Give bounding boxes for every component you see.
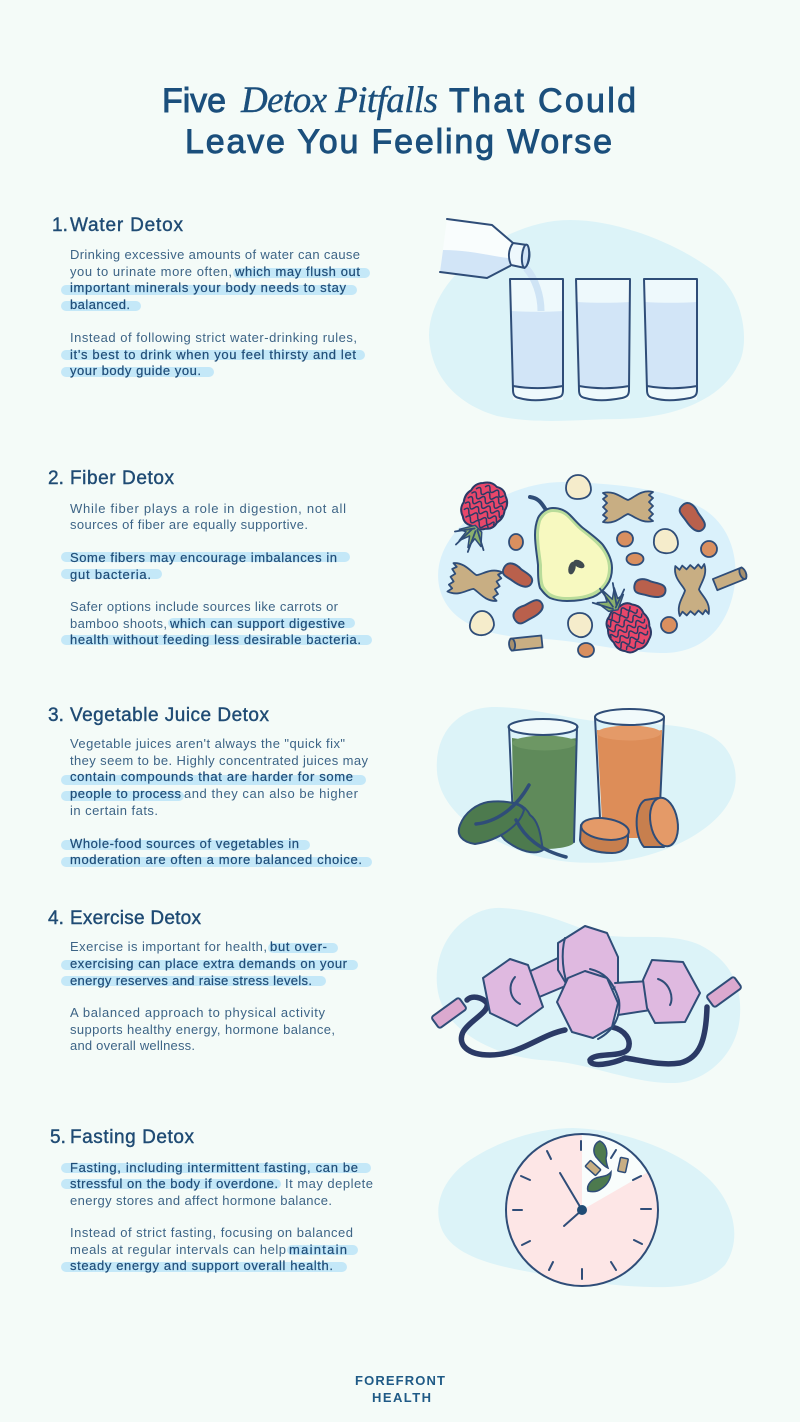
body text: vegetable juice detox: and they can also be higher	[184, 786, 359, 801]
body text: water detox: your body guide you.	[70, 363, 201, 378]
heading: fasting detox: 5.	[50, 1127, 66, 1148]
body text: vegetable juice detox: in certain fats.	[70, 803, 158, 818]
title: Leave You Feeling Worse	[185, 123, 612, 161]
clock outline	[506, 1134, 658, 1286]
highlight pills: fiber detox	[61, 552, 372, 645]
body text: fasting detox	[70, 1160, 373, 1273]
body text: vegetable juice detox: moderation are often a more balanced choice.	[70, 852, 362, 867]
tube pasta	[508, 567, 748, 651]
panel: fiber detox text	[48, 468, 372, 647]
heading: exercise detox: 4.	[48, 908, 64, 929]
panel: fasting detox text	[50, 1127, 373, 1273]
farfalle pasta	[447, 491, 709, 616]
body text: exercise detox	[70, 939, 348, 1053]
body text: fiber detox: Some fibers may encourage imbalances in	[70, 550, 337, 565]
body text: water detox: which may flush out	[234, 264, 360, 279]
body text: exercise detox: but over-	[270, 939, 327, 954]
small beans	[509, 532, 717, 657]
body text: fiber detox: bamboo shoots,	[70, 616, 167, 631]
body text: fasting detox: It may deplete	[285, 1176, 373, 1191]
clock ticks	[513, 1141, 651, 1279]
body text: exercise detox: supports healthy energy, hormone balance,	[70, 1022, 335, 1037]
body text: vegetable juice detox: they seem to be. Highly concentrated juices may	[70, 753, 368, 768]
illustration: vegetable juices	[437, 707, 736, 863]
heading: exercise detox: Exercise Detox	[70, 908, 202, 929]
illustration: fasting clock	[438, 1128, 734, 1287]
highlight pills: exercise detox	[61, 943, 358, 986]
body text: fasting detox: Instead of strict fasting, focusing on balanced	[70, 1225, 353, 1240]
glass 3	[644, 279, 697, 400]
body text: water detox: Drinking excessive amounts of water can cause	[70, 247, 360, 262]
body text: fiber detox: health without feeding less desirable bacteria.	[70, 632, 361, 647]
title: Detox Pitfalls	[240, 80, 438, 121]
body text: fasting detox: energy stores and affect hormone balance.	[70, 1193, 332, 1208]
green juice glass	[508, 719, 578, 849]
glass 2	[576, 279, 630, 400]
clock face	[506, 1134, 658, 1286]
heading: fiber detox: 2.	[48, 468, 64, 489]
glass 1	[510, 268, 563, 400]
body text: exercise detox: Exercise is important for health,	[70, 939, 267, 954]
body text: water detox: Instead of following strict water-drinking rules,	[70, 330, 357, 345]
heading: fasting detox: Fasting Detox	[70, 1127, 194, 1148]
carrot slices	[580, 796, 682, 853]
body text: water detox: balanced.	[70, 297, 130, 312]
water stream	[526, 268, 541, 311]
body text: fasting detox: maintain	[289, 1242, 347, 1257]
pear	[530, 497, 612, 601]
body text: vegetable juice detox: people to process	[70, 786, 182, 801]
body text: exercise detox: A balanced approach to physical activity	[70, 1005, 326, 1020]
body text: fasting detox: meals at regular intervals can help	[70, 1242, 286, 1257]
body text: vegetable juice detox: Vegetable juices aren't always the "quick fix"	[70, 736, 345, 751]
clock hands	[560, 1173, 587, 1226]
kidney beans	[500, 500, 709, 627]
pear seeds	[567, 558, 586, 575]
title	[162, 80, 636, 161]
logo: Forefront Health: HEALTH	[372, 1390, 431, 1405]
body text: fiber detox: gut bacteria.	[70, 567, 151, 582]
highlight pills: water detox	[61, 268, 370, 377]
body text: water detox: it's best to drink when you feel thirsty and let	[70, 347, 356, 362]
illustration: dumbbells and jump rope	[431, 908, 742, 1083]
highlight pills: vegetable juice detox	[61, 775, 372, 867]
dumbbell 2	[557, 960, 700, 1039]
logo: Forefront Health: FOREFRONT	[355, 1373, 445, 1388]
raspberries	[443, 475, 659, 659]
panel: water detox text	[52, 215, 370, 378]
body text: exercise detox: energy reserves and raise stress levels.	[70, 973, 312, 988]
heading: vegetable juice detox: 3.	[48, 705, 64, 726]
highlight pills: fasting detox	[61, 1163, 371, 1272]
title: That Could	[449, 82, 636, 120]
body text: water detox: you to urinate more often,	[70, 264, 232, 279]
bottle	[440, 219, 530, 278]
body text: fiber detox	[70, 501, 361, 647]
body text: fasting detox: stressful on the body if overdone.	[70, 1176, 278, 1191]
body text: vegetable juice detox	[70, 736, 368, 867]
body text: fiber detox: Safer options include sources like carrots or	[70, 599, 339, 614]
orange juice glass	[595, 709, 664, 838]
heading: fiber detox: Fiber Detox	[70, 468, 174, 489]
dumbbell 1	[483, 926, 618, 1026]
body text: fasting detox: steady energy and support overall health.	[70, 1258, 333, 1273]
body text: water detox	[70, 247, 360, 378]
heading: water detox: 1.	[52, 215, 68, 236]
illustration: fiber foods	[438, 475, 748, 659]
spinach leaves	[459, 785, 566, 857]
rope handles	[431, 976, 742, 1029]
body text: fiber detox: which can support digestive	[169, 616, 345, 631]
jump rope	[431, 976, 742, 1064]
body text: exercise detox: exercising can place extra demands on your	[70, 956, 348, 971]
foods in wedge	[585, 1141, 628, 1192]
body text: fiber detox: While fiber plays a role in digestion, not all	[70, 501, 346, 516]
body text: water detox: important minerals your body needs to stay	[70, 280, 346, 295]
logo: Forefront Health	[355, 1373, 445, 1405]
body text: exercise detox: and overall wellness.	[70, 1038, 195, 1053]
body text: vegetable juice detox: contain compounds that are harder for some	[70, 769, 353, 784]
title: Five	[162, 82, 226, 120]
body text: fasting detox: Fasting, including intermittent fasting, can be	[70, 1160, 358, 1175]
illustration: bottle pouring water into three glasses	[429, 219, 744, 421]
chickpeas	[470, 475, 678, 637]
heading: vegetable juice detox: Vegetable Juice Detox	[70, 705, 270, 726]
body text: vegetable juice detox: Whole-food sources of vegetables in	[70, 836, 299, 851]
heading: water detox: Water Detox	[70, 215, 184, 236]
panel: exercise detox text	[48, 908, 358, 1053]
panel: vegetable juice detox text	[48, 705, 372, 867]
feeding window wedge	[582, 1134, 648, 1210]
body text: fiber detox: sources of fiber are equally supportive.	[70, 517, 308, 532]
